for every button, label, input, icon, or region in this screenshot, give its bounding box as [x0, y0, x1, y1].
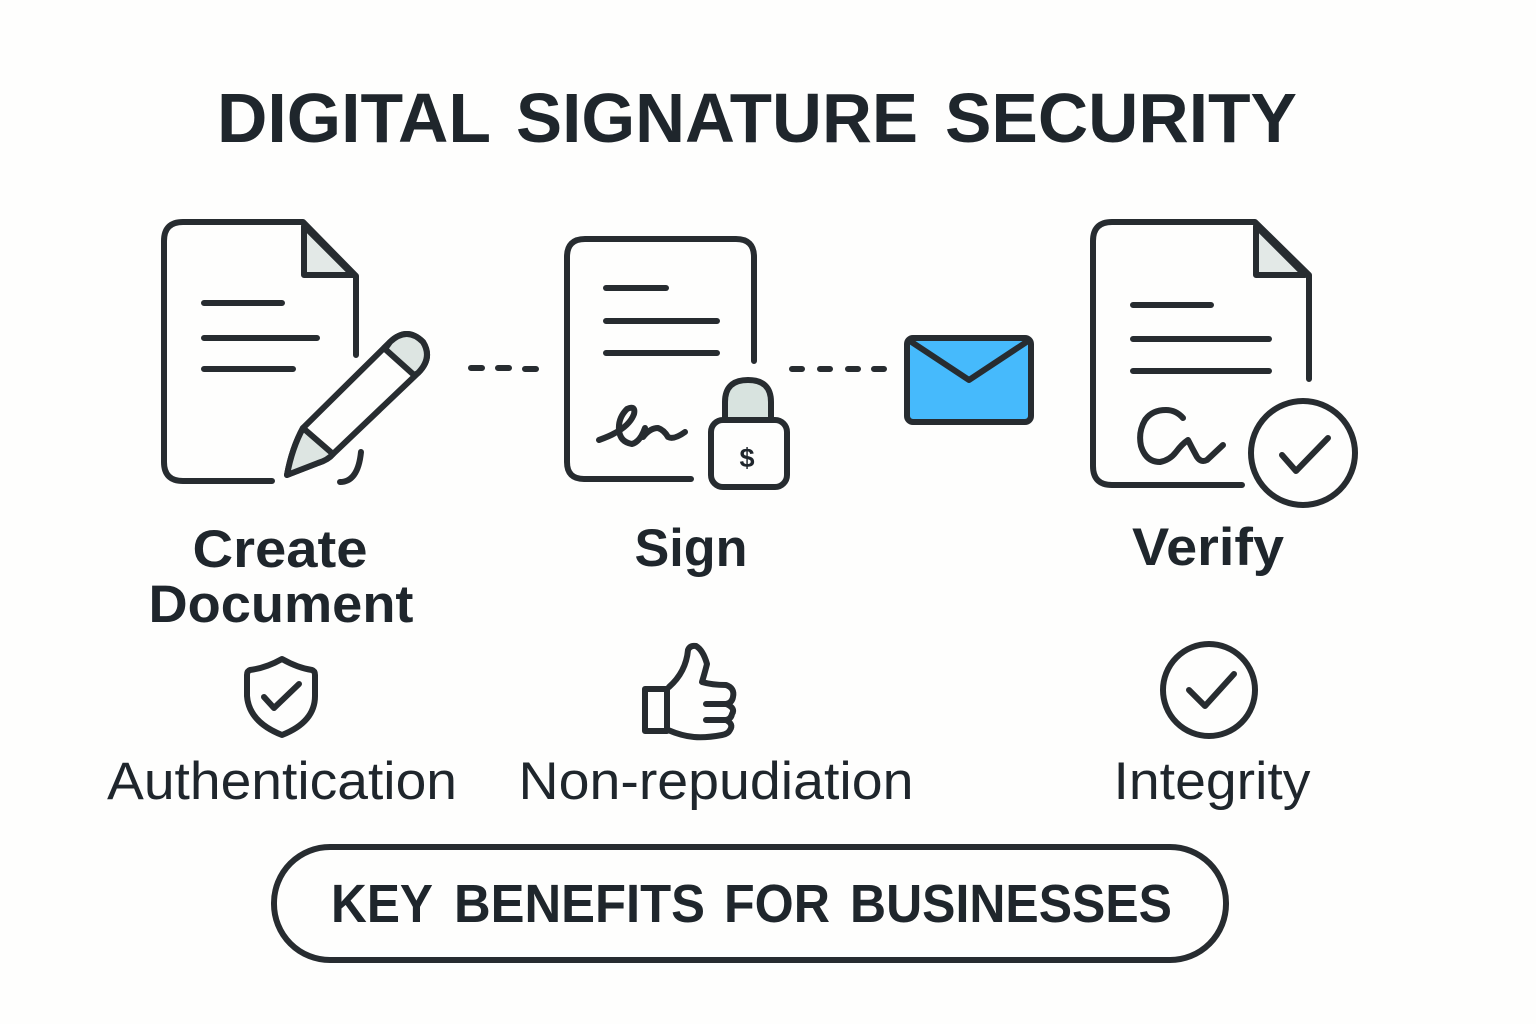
icon: signed document with lock [567, 239, 787, 487]
icon: shield [247, 659, 315, 735]
label: integrity: Integrity [1114, 752, 1311, 811]
title: SECURITY [945, 79, 1297, 157]
banner: key benefits: BUSINESSES [850, 874, 1172, 934]
label: non-repudiation: Non-repudiation [518, 752, 914, 811]
label: create document: Create [192, 520, 368, 579]
banner: key benefits: KEY [331, 874, 433, 934]
label: verify: Verify [1132, 518, 1285, 577]
title: DIGITAL [217, 79, 491, 157]
banner: key benefits [274, 847, 1226, 960]
icon: create document [164, 222, 427, 482]
icon: signed document with lock: $ [739, 443, 755, 473]
label: document: Document [148, 575, 414, 634]
banner: key benefits: FOR [724, 874, 830, 934]
title [217, 79, 1297, 157]
title: SIGNATURE [516, 79, 918, 157]
icon: envelope [907, 338, 1031, 422]
banner: key benefits: BENEFITS [454, 874, 705, 934]
dashed connector: create to sign [471, 368, 536, 369]
label: sign: Sign [634, 519, 748, 578]
icon: verified document [1093, 222, 1355, 505]
dashed connector: sign to envelope [792, 366, 884, 372]
icon: thumbs up [645, 646, 733, 737]
label: authentication: Authentication [107, 752, 457, 811]
icon: check circle [1163, 644, 1255, 736]
